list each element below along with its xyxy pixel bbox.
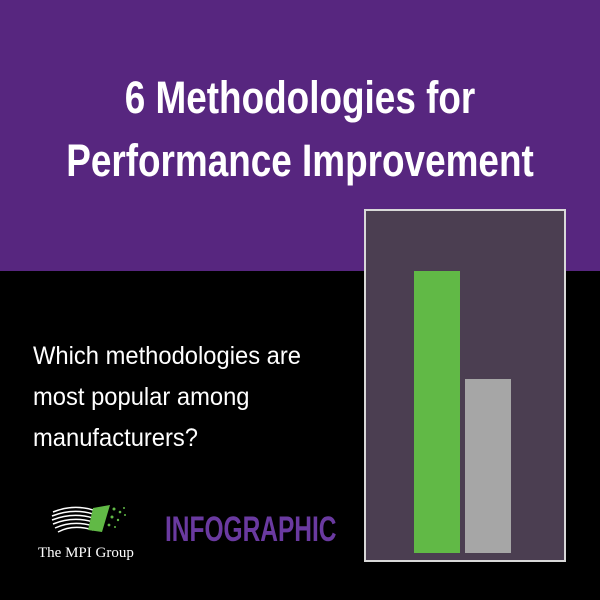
title: 6 Methodologies for [125, 72, 475, 123]
title: Performance Improvement [66, 135, 534, 186]
question text: most popular among [33, 383, 250, 411]
header band [0, 0, 600, 271]
question text [33, 342, 301, 452]
label: INFOGRAPHIC: INFOGRAPHIC [165, 510, 336, 549]
bar: gray [465, 379, 511, 553]
logo: MPI Group: The MPI Group [38, 545, 134, 561]
question text: Which methodologies are [33, 342, 301, 370]
chart panel [364, 209, 566, 562]
logo: MPI Group [38, 505, 134, 561]
title [66, 72, 534, 186]
question text: manufacturers? [33, 424, 198, 452]
bar: green [414, 271, 460, 553]
